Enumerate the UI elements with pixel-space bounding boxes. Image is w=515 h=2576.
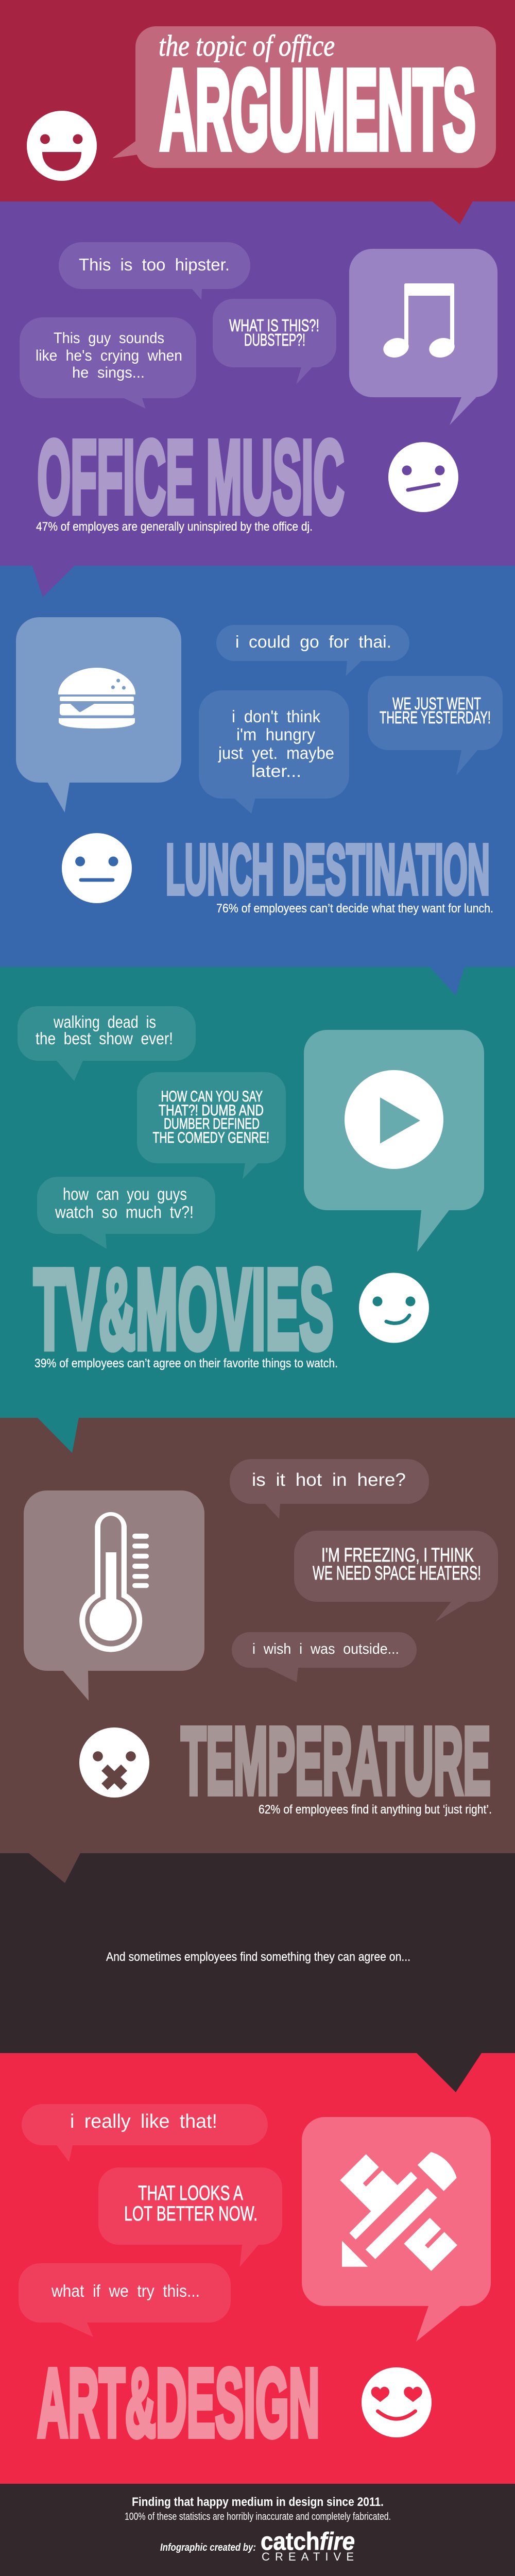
transition text: And sometimes employees find something they can agree on...: [106, 1950, 410, 1964]
bubble: looks better: [98, 2167, 282, 2267]
arrow: tv tail: [38, 1418, 79, 1453]
logo: catchfire creative: catchfire: [261, 2528, 355, 2555]
logo: catchfire creative: CREATIVE: [262, 2550, 354, 2563]
panel: transition: [0, 1853, 515, 2053]
bubble: dumb and dumber: DUMBER DEFINED: [164, 1115, 260, 1132]
panel: office music: [0, 201, 515, 566]
panel: art and design: [0, 2053, 515, 2484]
bubble: what is this: [213, 299, 336, 384]
face: laughing: [27, 111, 97, 181]
arrow: lunch tail: [430, 967, 465, 995]
bubble: looks better: LOT BETTER NOW.: [124, 2202, 258, 2225]
bubble: not hungry: i'm hungry: [236, 725, 315, 744]
arrow: transition tail: [417, 2053, 482, 2092]
bubble: is it hot: [230, 1459, 429, 1519]
bubble: looks better: THAT LOOKS A: [138, 2182, 243, 2205]
bubble: what if: [19, 2263, 231, 2337]
stat: office music: 47% of employes are generally uninspired by the office dj.: [36, 520, 313, 534]
footer disclaimer: 100% of these statistics are horribly inaccurate and completely fabricated.: [125, 2511, 391, 2522]
bubble: walking dead: [18, 1006, 196, 1081]
bubble: walking dead: walking dead is: [53, 1012, 156, 1031]
bubble: walking dead: the best show ever!: [36, 1029, 173, 1048]
bubble: really like that: [22, 2104, 268, 2162]
bubble: what if: what if we try this...: [51, 2281, 200, 2300]
panel: lunch destination: [0, 566, 515, 967]
arrow: header tail: [432, 201, 473, 224]
bubble: dumb and dumber: THAT?! DUMB AND: [159, 1102, 264, 1119]
face: unimpressed: [388, 442, 458, 512]
panel: tv and movies: [0, 967, 515, 1418]
bubble: not hungry: i don't think: [232, 707, 320, 726]
bubble: so much tv: watch so much tv?!: [55, 1202, 194, 1222]
panel: header: [0, 0, 515, 201]
bubble: yesterday: [368, 676, 503, 775]
bubble: dumb and dumber: THE COMEDY GENRE!: [152, 1129, 269, 1146]
bubble: this guy sounds: like he's crying when: [36, 347, 182, 364]
face: neutral: [62, 833, 132, 903]
bubble: outside: i wish i was outside...: [252, 1641, 399, 1657]
icon bubble: thermometer: [24, 1490, 204, 1701]
bubble: this guy sounds: he sings...: [72, 364, 145, 381]
footer credit: Infographic created by:: [160, 2542, 256, 2553]
arrow: music tail: [32, 566, 75, 597]
face: heart eyes: [362, 2367, 432, 2437]
bubble: so much tv: how can you guys: [63, 1184, 187, 1204]
face: silenced: [79, 1727, 149, 1798]
stat: tv: 39% of employees can’t agree on their favorite things to watch.: [35, 1357, 338, 1370]
bubble: what is this: DUBSTEP?!: [244, 330, 305, 349]
bubble: this is too hipster: [59, 242, 250, 300]
bubble: not hungry: just yet. maybe: [218, 743, 334, 762]
bubble: this guy sounds: This guy sounds: [54, 330, 164, 347]
bubble: is it hot: is it hot in here?: [252, 1470, 406, 1490]
bubble: what is this: WHAT IS THIS?!: [229, 316, 319, 335]
bubble: dumb and dumber: HOW CAN YOU SAY: [161, 1088, 263, 1105]
bubble: really like that: i really like that!: [70, 2111, 217, 2132]
bubble: this guy sounds: [20, 317, 196, 409]
bubble: this is too hipster: This is too hipster.: [79, 255, 230, 274]
bubble: freezing: [294, 1531, 498, 1622]
arrow: temperature tail: [29, 1853, 80, 1883]
panel: temperature: [0, 1418, 515, 1853]
bubble: not hungry: later...: [251, 761, 301, 781]
icon bubble: music note: [349, 249, 497, 425]
bubble: so much tv: [37, 1177, 215, 1249]
icon bubble: burger: [16, 617, 181, 812]
bubble: outside: [232, 1632, 417, 1682]
bubble: dumb and dumber: [137, 1072, 286, 1179]
icon bubble: play: [304, 1030, 484, 1252]
bubble: thai: i could go for thai.: [235, 632, 391, 651]
panel: footer: [0, 2484, 515, 2576]
title: script line: the topic of office: [159, 29, 335, 62]
bubble: not hungry: [199, 690, 349, 814]
icon bubble: pencil and ruler: [302, 2117, 491, 2342]
bubble: thai: [216, 625, 409, 676]
title bubble: [112, 26, 496, 173]
face: smile: [359, 1273, 429, 1343]
footer tagline: Finding that happy medium in design since 2011.: [132, 2495, 384, 2509]
